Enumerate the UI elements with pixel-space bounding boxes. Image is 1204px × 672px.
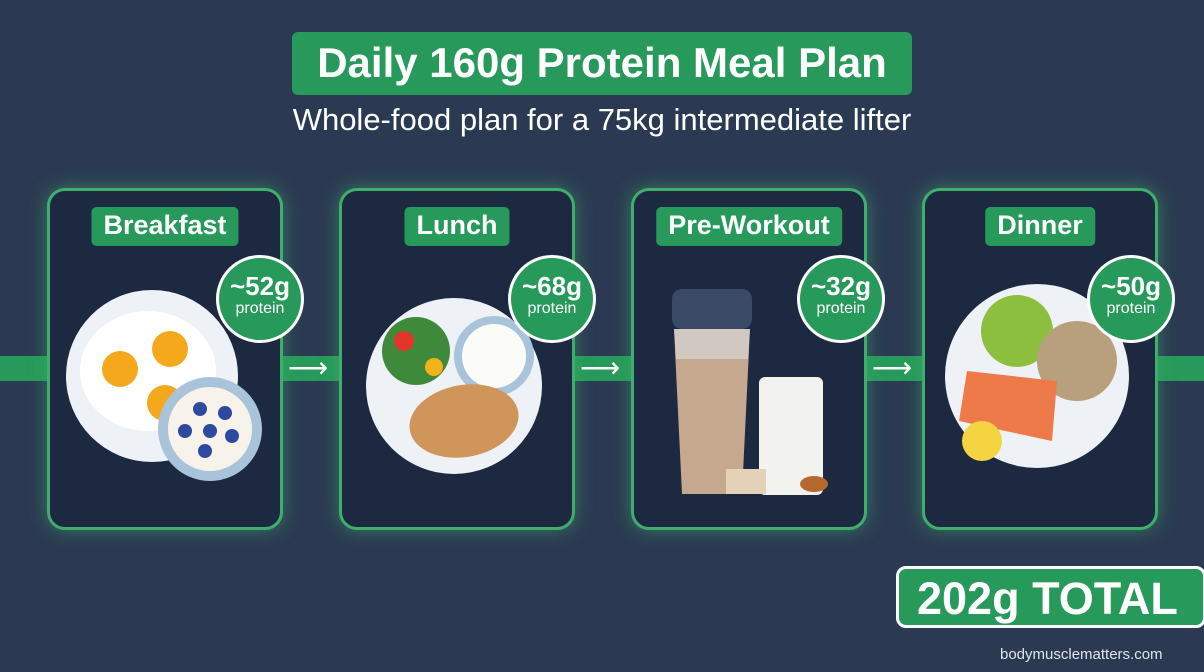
total box: 202g TOTAL [917, 573, 1178, 624]
arrow: ⟶ [872, 352, 912, 383]
label [656, 207, 842, 246]
illustration: eggs and yogurt [66, 290, 262, 481]
total box [896, 566, 1204, 628]
illustration: chicken, veg, rice [366, 298, 542, 474]
badge: protein [236, 300, 284, 317]
badge: protein [528, 300, 576, 317]
card: dinner [922, 188, 1158, 530]
label [985, 207, 1095, 246]
badge: ~68g [522, 271, 582, 301]
badge: ~32g [811, 271, 871, 301]
badge: protein [817, 300, 865, 317]
subtitle: Whole-food plan for a 75kg intermediate lifter [293, 102, 911, 137]
badge [216, 255, 304, 343]
label: Dinner [997, 210, 1083, 240]
title [292, 32, 912, 95]
illustration: salmon, edamame, quinoa [945, 284, 1129, 468]
illustration: shaker and milk [672, 289, 828, 495]
label: Lunch [416, 210, 498, 240]
label [91, 207, 239, 246]
arrow: ⟶ [580, 352, 620, 383]
badge [508, 255, 596, 343]
badge [1087, 255, 1175, 343]
label: Breakfast [103, 210, 227, 240]
card: pre-workout [631, 188, 867, 530]
arrow: ⟶ [288, 352, 328, 383]
connector band [0, 356, 1204, 381]
card: lunch [339, 188, 575, 530]
badge: ~52g [230, 271, 290, 301]
footer url: bodymusclematters.com [1000, 646, 1163, 663]
label: Pre-Workout [668, 210, 830, 240]
badge: ~50g [1101, 271, 1161, 301]
label [404, 207, 510, 246]
title: Daily 160g Protein Meal Plan [317, 39, 887, 86]
card: breakfast [47, 188, 283, 530]
badge: protein [1107, 300, 1155, 317]
badge [797, 255, 885, 343]
